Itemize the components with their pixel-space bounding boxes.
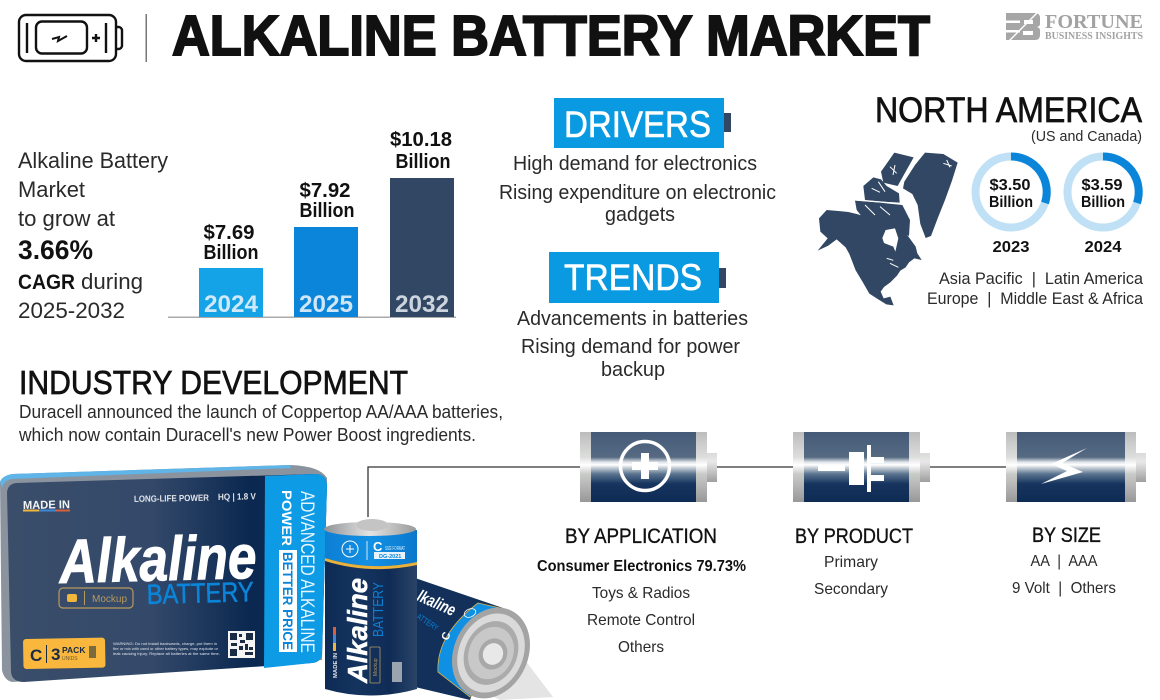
illustration: battery pack: BATTERY xyxy=(146,576,254,610)
text block: industry development: Duracell announced the launch of Coppertop AA/AAA batteries, xyxy=(19,402,503,422)
column: by size: AA | AAA xyxy=(1030,553,1098,570)
illustration: battery pack: PACK xyxy=(62,645,86,655)
illustration: battery pack: UNIDS xyxy=(62,656,78,662)
illustration: standing battery: C xyxy=(373,539,383,554)
illustration: battery pack: MADE IN xyxy=(23,499,70,512)
illustration: lying battery xyxy=(414,578,553,700)
icon: application battery xyxy=(580,432,717,502)
donut chart: 2024: $3.59 xyxy=(1082,177,1123,194)
illustration: battery pack: Alkaline xyxy=(57,523,257,597)
bar 2024: Billion xyxy=(204,242,258,264)
bar 2024: 2024 xyxy=(204,291,259,318)
bar 2032 xyxy=(390,129,454,318)
illustration: battery pack: 3 xyxy=(51,645,60,664)
other regions: Asia Pacific | Latin America xyxy=(939,269,1144,288)
illustration: battery pack: leak causing injury. Replace all batteries at the same time. xyxy=(113,652,220,656)
bar 2025: $7.92 xyxy=(300,180,350,202)
text block: CAGR summary: during xyxy=(81,269,143,294)
donut chart: 2023: $3.50 xyxy=(990,177,1031,194)
connector line xyxy=(368,467,1006,517)
donut chart: 2023: 2023 xyxy=(992,239,1030,256)
logo: Fortune Business Insights xyxy=(1006,11,1143,42)
illustration: standing battery: MADE IN xyxy=(333,653,339,678)
column: by product: BY PRODUCT xyxy=(795,525,913,548)
illustration: battery pack: ADVANCED ALKALINE xyxy=(296,491,317,653)
illustration: lying battery: C xyxy=(440,630,454,642)
illustration: standing battery: DG-2021 xyxy=(379,554,401,560)
bar 2025 xyxy=(294,180,358,318)
text block: CAGR summary: Market xyxy=(18,177,85,202)
heading: North America: (US and Canada) xyxy=(1031,128,1142,145)
bar 2024: $7.69 xyxy=(204,222,254,244)
illustration: battery pack: HQ | 1.8 V xyxy=(218,491,256,502)
illustration: battery pack xyxy=(0,465,327,682)
donut chart: 2024 xyxy=(1068,156,1139,256)
column: by application xyxy=(537,525,746,656)
column: by size: 9 Volt | Others xyxy=(1012,580,1116,597)
text block: CAGR summary xyxy=(18,148,168,323)
column: by product xyxy=(795,525,913,598)
column: by application: Others xyxy=(618,639,664,656)
text block: CAGR summary: 2025-2032 xyxy=(18,298,125,323)
heading: North America: NORTH AMERICA xyxy=(875,91,1143,130)
header divider xyxy=(146,14,147,62)
illustration: lying battery: ATTERY xyxy=(415,611,441,633)
bar 2024 xyxy=(199,222,263,318)
panel: trends: Rising demand for power xyxy=(521,335,740,358)
other regions xyxy=(927,269,1144,308)
logo: Fortune Business Insights: BUSINESS INSIGHTS xyxy=(1045,31,1143,42)
illustration: battery pack: C xyxy=(30,646,42,665)
text block: CAGR summary: Alkaline Battery xyxy=(18,148,168,173)
illustration: standing battery: BATTERY xyxy=(370,582,387,637)
column: by application: Toys & Radios xyxy=(592,585,690,602)
illustration: lying battery: lkaline xyxy=(414,586,459,620)
panel: trends: Advancements in batteries xyxy=(517,307,748,330)
other regions: Europe | Middle East & Africa xyxy=(927,289,1144,308)
text block: industry development xyxy=(18,402,503,445)
illustration: battery pack: BETTER PRICE xyxy=(280,552,296,650)
panel: trends xyxy=(517,252,748,381)
column: by application: Remote Control xyxy=(587,612,695,629)
illustration: standing battery: Alkaline xyxy=(342,578,373,684)
panel: drivers xyxy=(499,98,776,226)
panel: drivers: gadgets xyxy=(605,203,675,226)
text block: CAGR summary: to grow at xyxy=(18,206,115,231)
panel: trends: TRENDS xyxy=(564,257,702,298)
illustration: battery pack: fire or mix with used or other battery types, may explode or xyxy=(113,647,219,651)
illustration: standing battery: SIZE FORMAT xyxy=(385,546,405,552)
illustration: standing battery xyxy=(324,519,417,696)
text block: CAGR summary: CAGR xyxy=(18,271,75,294)
logo: Fortune Business Insights: FORTUNE xyxy=(1045,11,1143,33)
heading: North America xyxy=(875,91,1143,145)
panel: drivers: DRIVERS xyxy=(564,104,711,145)
bar 2032: Billion xyxy=(396,151,450,173)
donut chart: 2024: Billion xyxy=(1081,194,1125,211)
bar chart: market size xyxy=(168,129,456,318)
heading: industry development: INDUSTRY DEVELOPMENT xyxy=(19,364,408,401)
bar 2025: Billion xyxy=(300,200,354,222)
donut chart: 2024: 2024 xyxy=(1084,239,1122,256)
donut chart: 2023: Billion xyxy=(989,194,1033,211)
text block: CAGR summary: 3.66% xyxy=(18,235,93,265)
column: by application: BY APPLICATION xyxy=(565,525,717,548)
illustration: battery pack: POWER xyxy=(279,490,295,546)
bar 2025: 2025 xyxy=(299,291,353,318)
column: by product: Secondary xyxy=(814,581,888,598)
panel: drivers: High demand for electronics xyxy=(513,152,757,175)
illustration: battery pack: LONG-LIFE POWER xyxy=(134,493,209,504)
illustration: battery pack: WARNING: Do not install backwards, charge, put them in xyxy=(113,642,217,646)
column: by size: BY SIZE xyxy=(1032,524,1101,547)
illustration: standing battery: Mockup xyxy=(373,658,379,676)
column: by size xyxy=(1012,524,1116,597)
column: by application: Consumer Electronics 79.73% xyxy=(537,558,746,575)
donut chart: 2023 xyxy=(976,156,1047,256)
icon: size battery xyxy=(1006,432,1146,502)
icon: product battery xyxy=(793,432,930,502)
column: by product: Primary xyxy=(824,554,878,571)
panel: drivers: Rising expenditure on electronic xyxy=(499,181,776,204)
icon: battery xyxy=(19,15,122,61)
bar 2032: 2032 xyxy=(395,291,449,318)
panel: trends: backup xyxy=(601,358,665,381)
title: ALKALINE BATTERY MARKET xyxy=(172,4,930,68)
bar 2032: $10.18 xyxy=(390,129,452,151)
illustration: battery pack: Mockup xyxy=(92,594,127,605)
text block: industry development: which now contain Duracell's new Power Boost ingredients. xyxy=(18,425,476,445)
map: North America xyxy=(818,153,958,305)
